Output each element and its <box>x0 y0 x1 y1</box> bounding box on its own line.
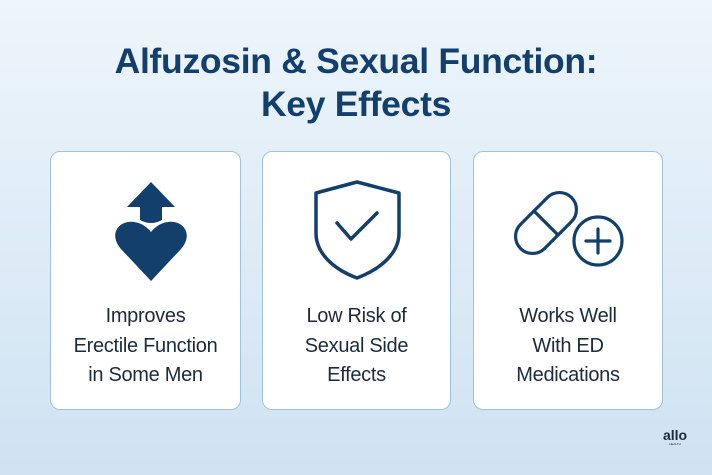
text: label 2: Low Risk of <box>306 305 407 327</box>
logo: allo health: allo <box>663 427 687 443</box>
text: label 3 <box>516 305 620 386</box>
logo: allo health: HEALTH <box>669 442 681 446</box>
title: Key Effects <box>261 84 451 124</box>
panel: works with ED meds <box>473 151 663 410</box>
text: label 3: Medications <box>516 364 620 386</box>
text: label 3: With ED <box>532 334 604 356</box>
text: label 1: Erectile Function <box>74 334 217 356</box>
icon: shield check <box>314 180 401 280</box>
text: label 1: Improves <box>106 305 185 327</box>
title <box>115 41 597 124</box>
text: label 2: Sexual Side <box>305 334 408 356</box>
text: label 2: Effects <box>327 364 386 386</box>
text: label 2 <box>305 305 408 386</box>
text: label 3: Works Well <box>519 305 617 327</box>
title: Alfuzosin & Sexual Function: <box>115 41 597 81</box>
panel: improves erectile function <box>50 151 241 410</box>
icon: pill and plus <box>514 191 624 267</box>
panel: low risk <box>262 151 451 410</box>
icon: heart with up arrow <box>115 182 187 281</box>
text: label 1 <box>74 305 217 386</box>
text: label 1: in Some Men <box>88 364 203 386</box>
